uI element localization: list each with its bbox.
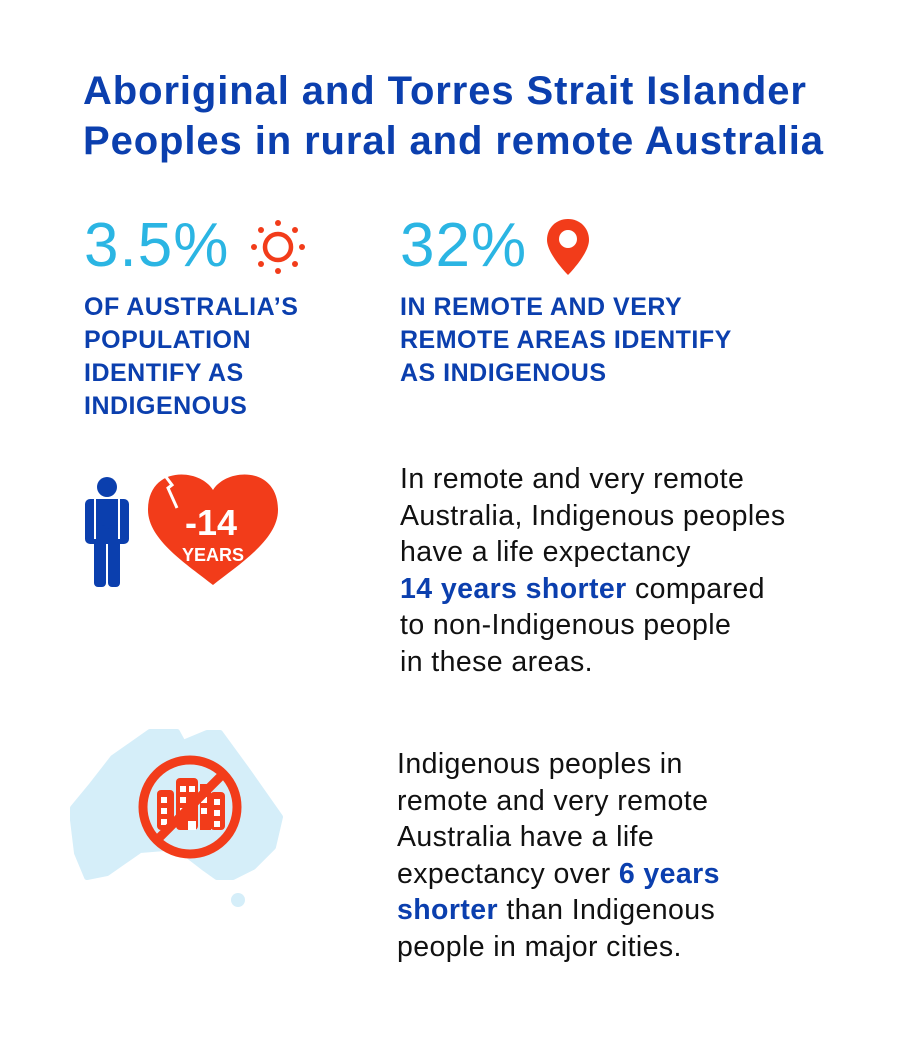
caption: POPULATION	[84, 326, 251, 354]
title: Aboriginal and Torres Strait Islander	[83, 69, 807, 113]
text: life expectancy 6 years: remote and very remote	[397, 784, 708, 816]
caption: REMOTE AREAS IDENTIFY	[400, 326, 732, 354]
icon: australia map with no-city sign	[70, 729, 283, 907]
text: life expectancy 14 years: 14 years shorter compared	[400, 572, 765, 604]
stat: 32%	[400, 211, 732, 387]
text: life expectancy 14 years: In remote and very remote	[400, 463, 744, 495]
icon: person and heart	[85, 474, 278, 587]
caption: IDENTIFY AS	[84, 359, 244, 387]
text: life expectancy 14 years	[400, 463, 786, 678]
caption: IN REMOTE AND VERY	[400, 293, 682, 321]
text: life expectancy 6 years: shorter than Indigenous	[397, 894, 715, 926]
title: Peoples in rural and remote Australia	[83, 119, 824, 163]
icon: person and heart: -14	[185, 502, 237, 543]
text: life expectancy 14 years: have a life expectancy	[400, 536, 691, 568]
stat: 3.5%	[84, 211, 305, 420]
caption: AS INDIGENOUS	[400, 359, 607, 387]
text: life expectancy 14 years: Australia, Indigenous peoples	[400, 500, 786, 532]
caption	[400, 293, 732, 387]
text: life expectancy 6 years: Australia have a life	[397, 821, 654, 853]
text: life expectancy 6 years: expectancy over 6 years	[397, 858, 720, 890]
text: life expectancy 6 years	[397, 748, 720, 962]
caption: OF AUSTRALIA’S	[84, 293, 298, 321]
title	[83, 69, 824, 163]
big number: 3.5%	[84, 211, 229, 280]
icon: person and heart: YEARS	[182, 545, 244, 565]
big number: 32%	[400, 211, 527, 280]
text: life expectancy 6 years: Indigenous peoples in	[397, 748, 683, 780]
icon: sun	[251, 220, 305, 274]
text: life expectancy 14 years: to non-Indigenous people	[400, 609, 731, 641]
icon: location pin	[547, 219, 589, 275]
text: life expectancy 6 years: people in major cities.	[397, 930, 682, 962]
text: life expectancy 14 years: in these areas.	[400, 646, 593, 678]
caption: INDIGENOUS	[84, 392, 247, 420]
caption	[84, 293, 298, 420]
